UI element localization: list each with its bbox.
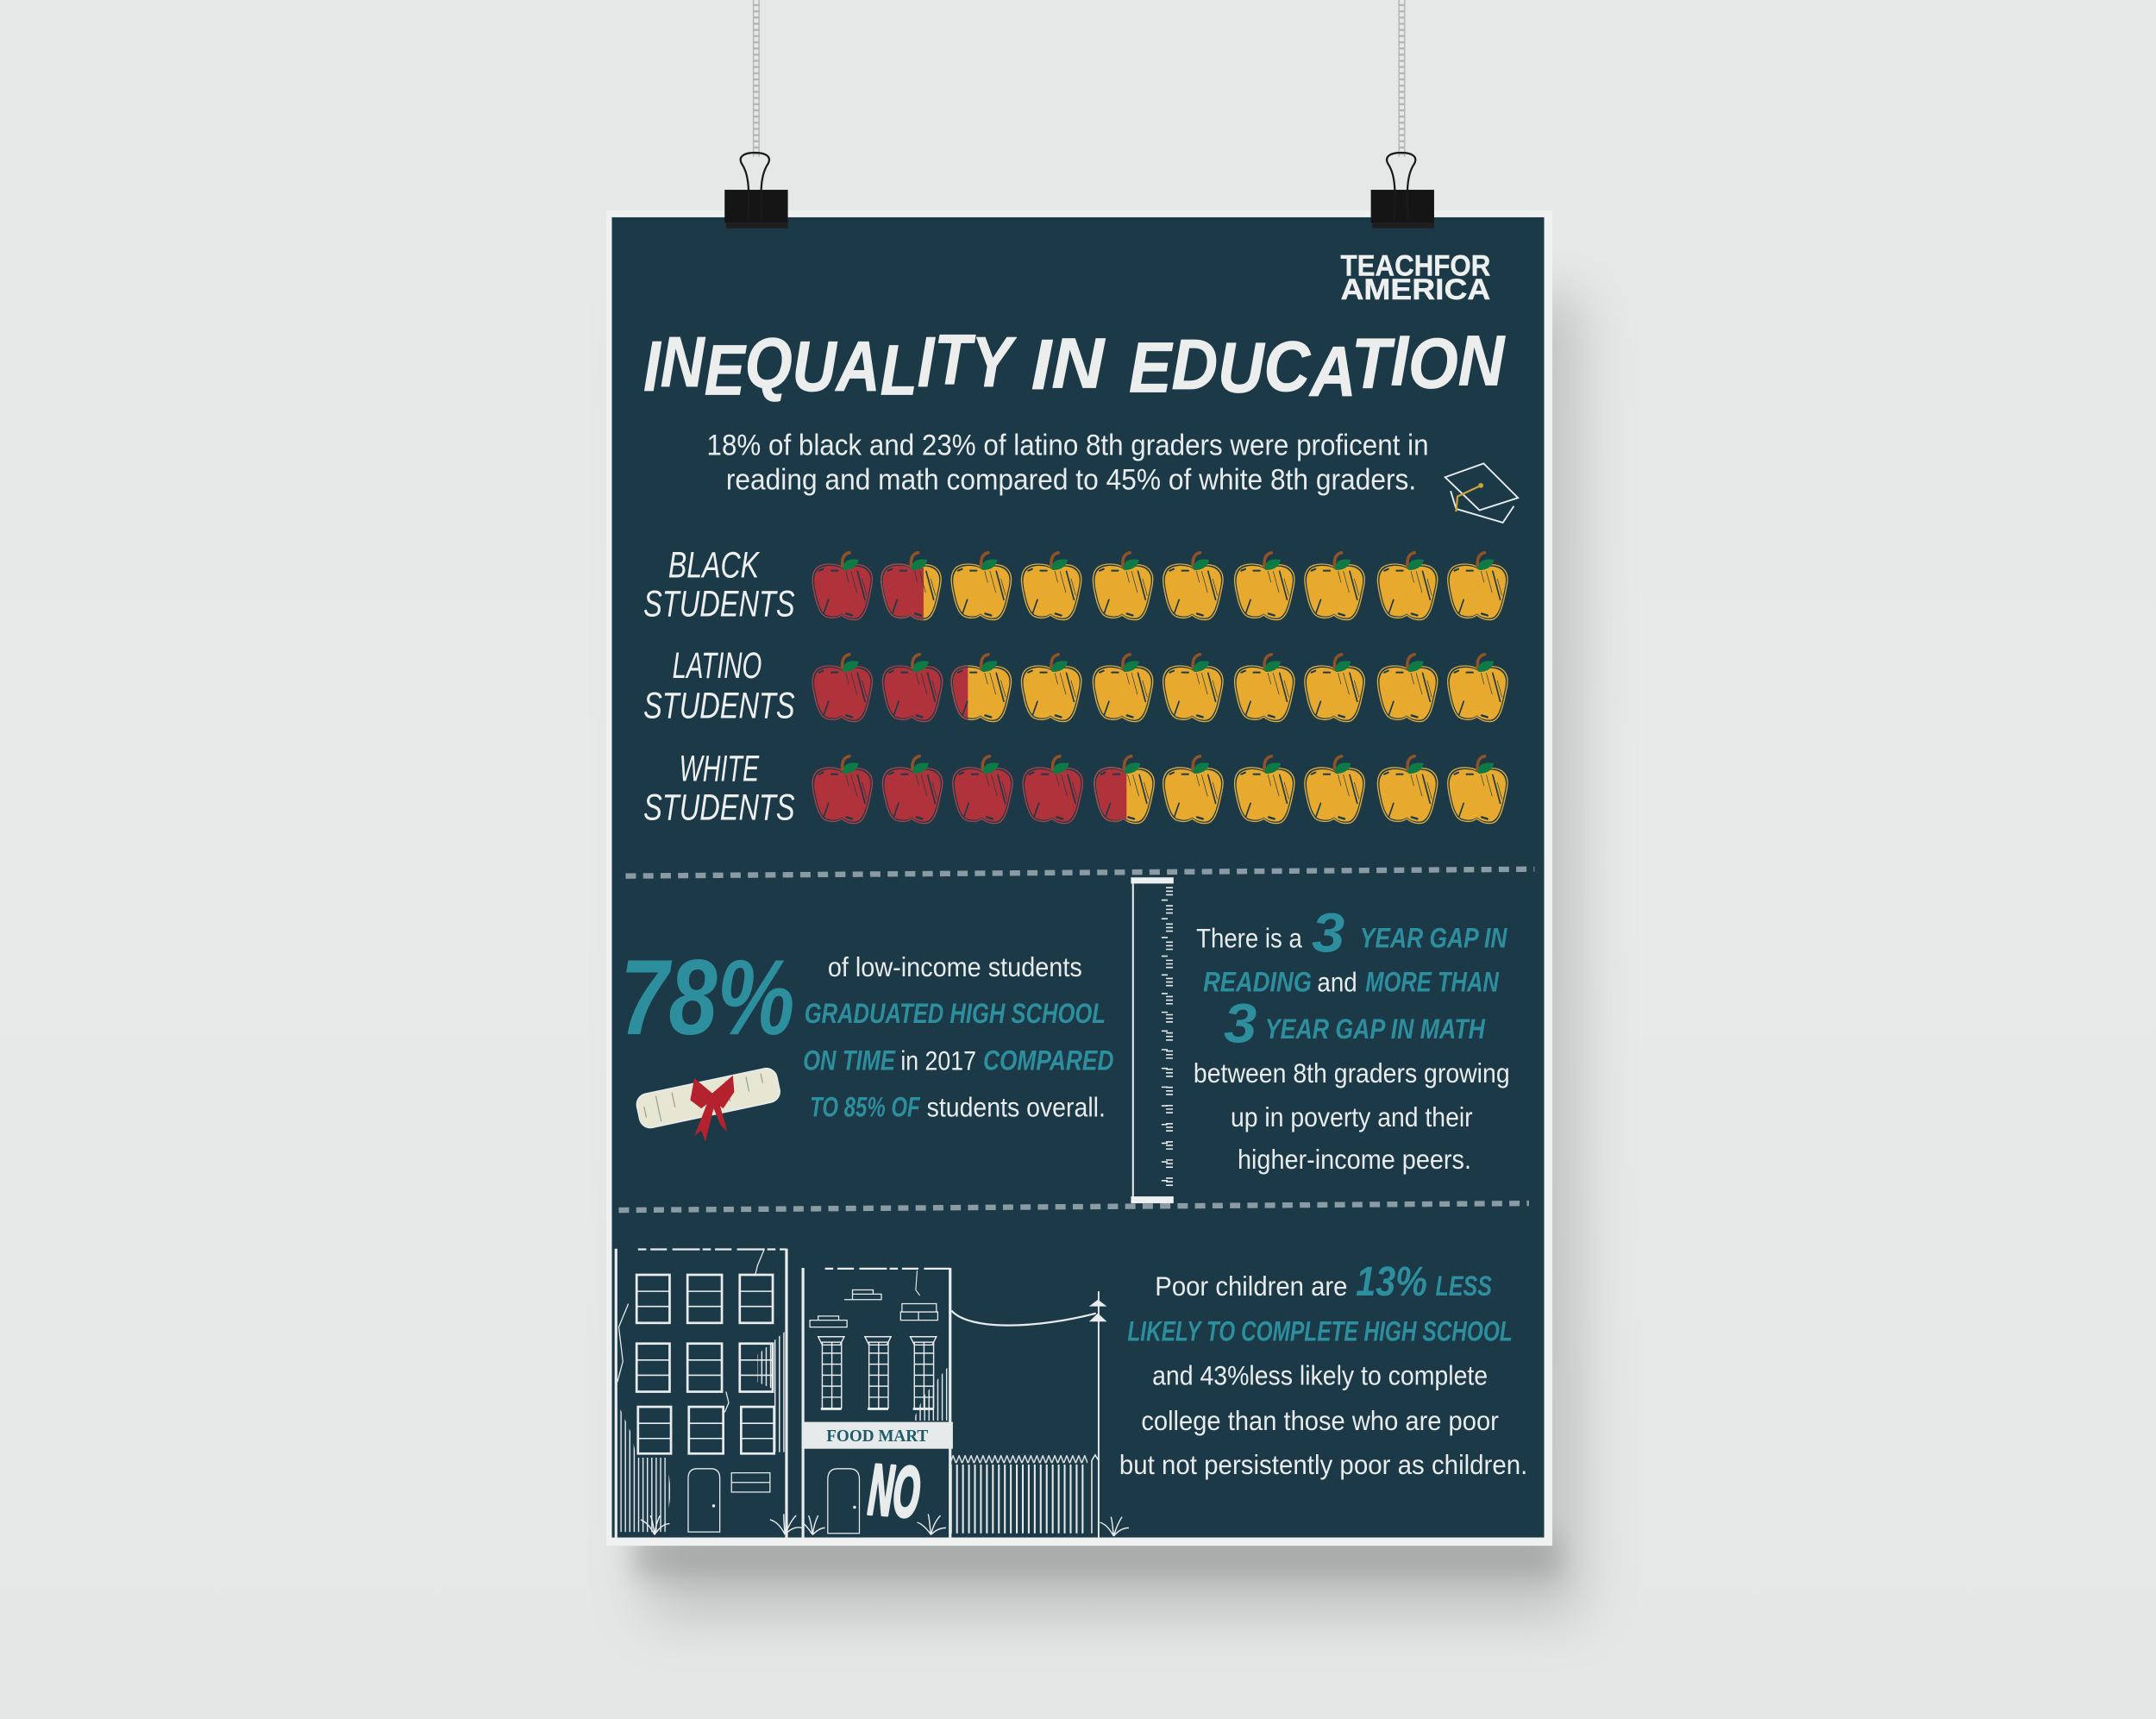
panel: persistent poverty text: but not persistently poor as children. xyxy=(1119,1449,1527,1480)
panel: reading and math gap: between 8th graders growing xyxy=(1194,1057,1510,1088)
icon: graduation cap xyxy=(1445,463,1518,523)
row label: latino students: LATINO xyxy=(673,645,761,687)
graduation text: ON TIME xyxy=(803,1044,896,1076)
graduation text: of low-income students xyxy=(828,951,1082,982)
apple row: latino students 23% xyxy=(812,655,1507,722)
icon: diploma xyxy=(635,1066,782,1141)
graduation text: students overall. xyxy=(927,1092,1106,1123)
chalkboard panel xyxy=(612,217,1544,1538)
panel: reading and math gap: and xyxy=(1317,967,1357,998)
panel: reading and math gap: READING xyxy=(1203,966,1312,998)
hanging rope left xyxy=(754,0,758,157)
big number 78%: 78% xyxy=(620,938,795,1057)
poster sheet xyxy=(606,210,1552,1546)
apple: full red xyxy=(812,553,872,620)
graduation text: COMPARED xyxy=(983,1044,1113,1076)
apple: partial red xyxy=(951,655,1012,722)
title xyxy=(643,319,1506,411)
graduation text xyxy=(803,951,1113,1123)
graduation text: GRADUATED HIGH SCHOOL xyxy=(805,997,1106,1029)
logo: Teach For America: TEACHFOR xyxy=(1341,250,1491,283)
logo: Teach For America: AMERICA xyxy=(1341,273,1490,306)
graduation text: TO 85% OF xyxy=(810,1091,920,1123)
panel: reading and math gap xyxy=(1194,901,1510,1175)
intro text xyxy=(707,430,1429,497)
panel: reading and math gap: There is a xyxy=(1196,923,1302,954)
intro text: 18% of black and 23% of latino 8th graders were proficent in xyxy=(707,430,1429,462)
ruler divider xyxy=(1131,877,1174,1203)
row label: latino students xyxy=(643,645,795,726)
title: INEQUALITY xyxy=(643,319,1017,411)
hanging rope right xyxy=(1400,0,1404,157)
second large 3: 3 xyxy=(1224,993,1257,1055)
title: IN xyxy=(1031,323,1106,405)
panel: persistent poverty text: LIKELY TO COMPLETE HIGH SCHOOL xyxy=(1127,1315,1513,1347)
panel: reading and math gap: YEAR GAP IN xyxy=(1360,922,1508,954)
grass tufts xyxy=(641,1514,1129,1536)
poster shadow xyxy=(636,296,1582,1615)
title: EDUCATION xyxy=(1129,320,1506,411)
panel: persistent poverty text: Poor children are xyxy=(1155,1270,1348,1302)
panel: graduation stat xyxy=(620,938,1113,1141)
binder clip left xyxy=(724,153,788,229)
panel: persistent poverty text: and 43%less likely to complete xyxy=(1152,1360,1488,1391)
panel: reading and math gap: YEAR GAP IN MATH xyxy=(1265,1013,1486,1045)
row label: white students: WHITE xyxy=(680,749,760,790)
panel: reading and math gap: higher-income peers. xyxy=(1238,1144,1471,1175)
row label: white students xyxy=(643,749,795,828)
utility pole and wire xyxy=(951,1291,1106,1538)
binder clip right xyxy=(1371,153,1434,229)
intro text: reading and math compared to 45% of white 8th graders. xyxy=(726,464,1416,497)
large 3: 3 xyxy=(1312,901,1344,963)
building: apartment xyxy=(616,1249,787,1538)
row label: black students: BLACK xyxy=(668,545,761,587)
panel: reading and math gap: MORE THAN xyxy=(1365,966,1500,998)
row label: black students xyxy=(643,545,795,624)
apple: partial red xyxy=(1094,756,1154,824)
panel: persistent poverty text: LESS xyxy=(1436,1270,1492,1302)
fence xyxy=(950,1455,1099,1534)
row label: black students: STUDENTS xyxy=(643,583,795,624)
row label: white students: STUDENTS xyxy=(643,787,795,828)
logo: Teach For America xyxy=(1341,250,1491,306)
apple row: black students 18% xyxy=(812,553,1507,620)
panel: persistent poverty text xyxy=(1119,1259,1527,1480)
sign: food mart: FOOD MART xyxy=(826,1427,928,1446)
apple row: white students 45% xyxy=(812,756,1507,824)
illustration: street scene xyxy=(616,1249,1129,1538)
panel: persistent poverty text: 13% xyxy=(1356,1259,1427,1305)
graffiti: NO: NO xyxy=(866,1449,923,1533)
row label: latino students: STUDENTS xyxy=(643,685,795,726)
panel: reading and math gap: up in poverty and their xyxy=(1231,1101,1473,1132)
sign: food mart xyxy=(802,1422,953,1449)
graduation text: in 2017 xyxy=(900,1045,976,1076)
apple: partial red xyxy=(881,553,941,620)
panel: persistent poverty text: college than those who are poor xyxy=(1141,1405,1499,1436)
building: food mart xyxy=(802,1268,953,1538)
